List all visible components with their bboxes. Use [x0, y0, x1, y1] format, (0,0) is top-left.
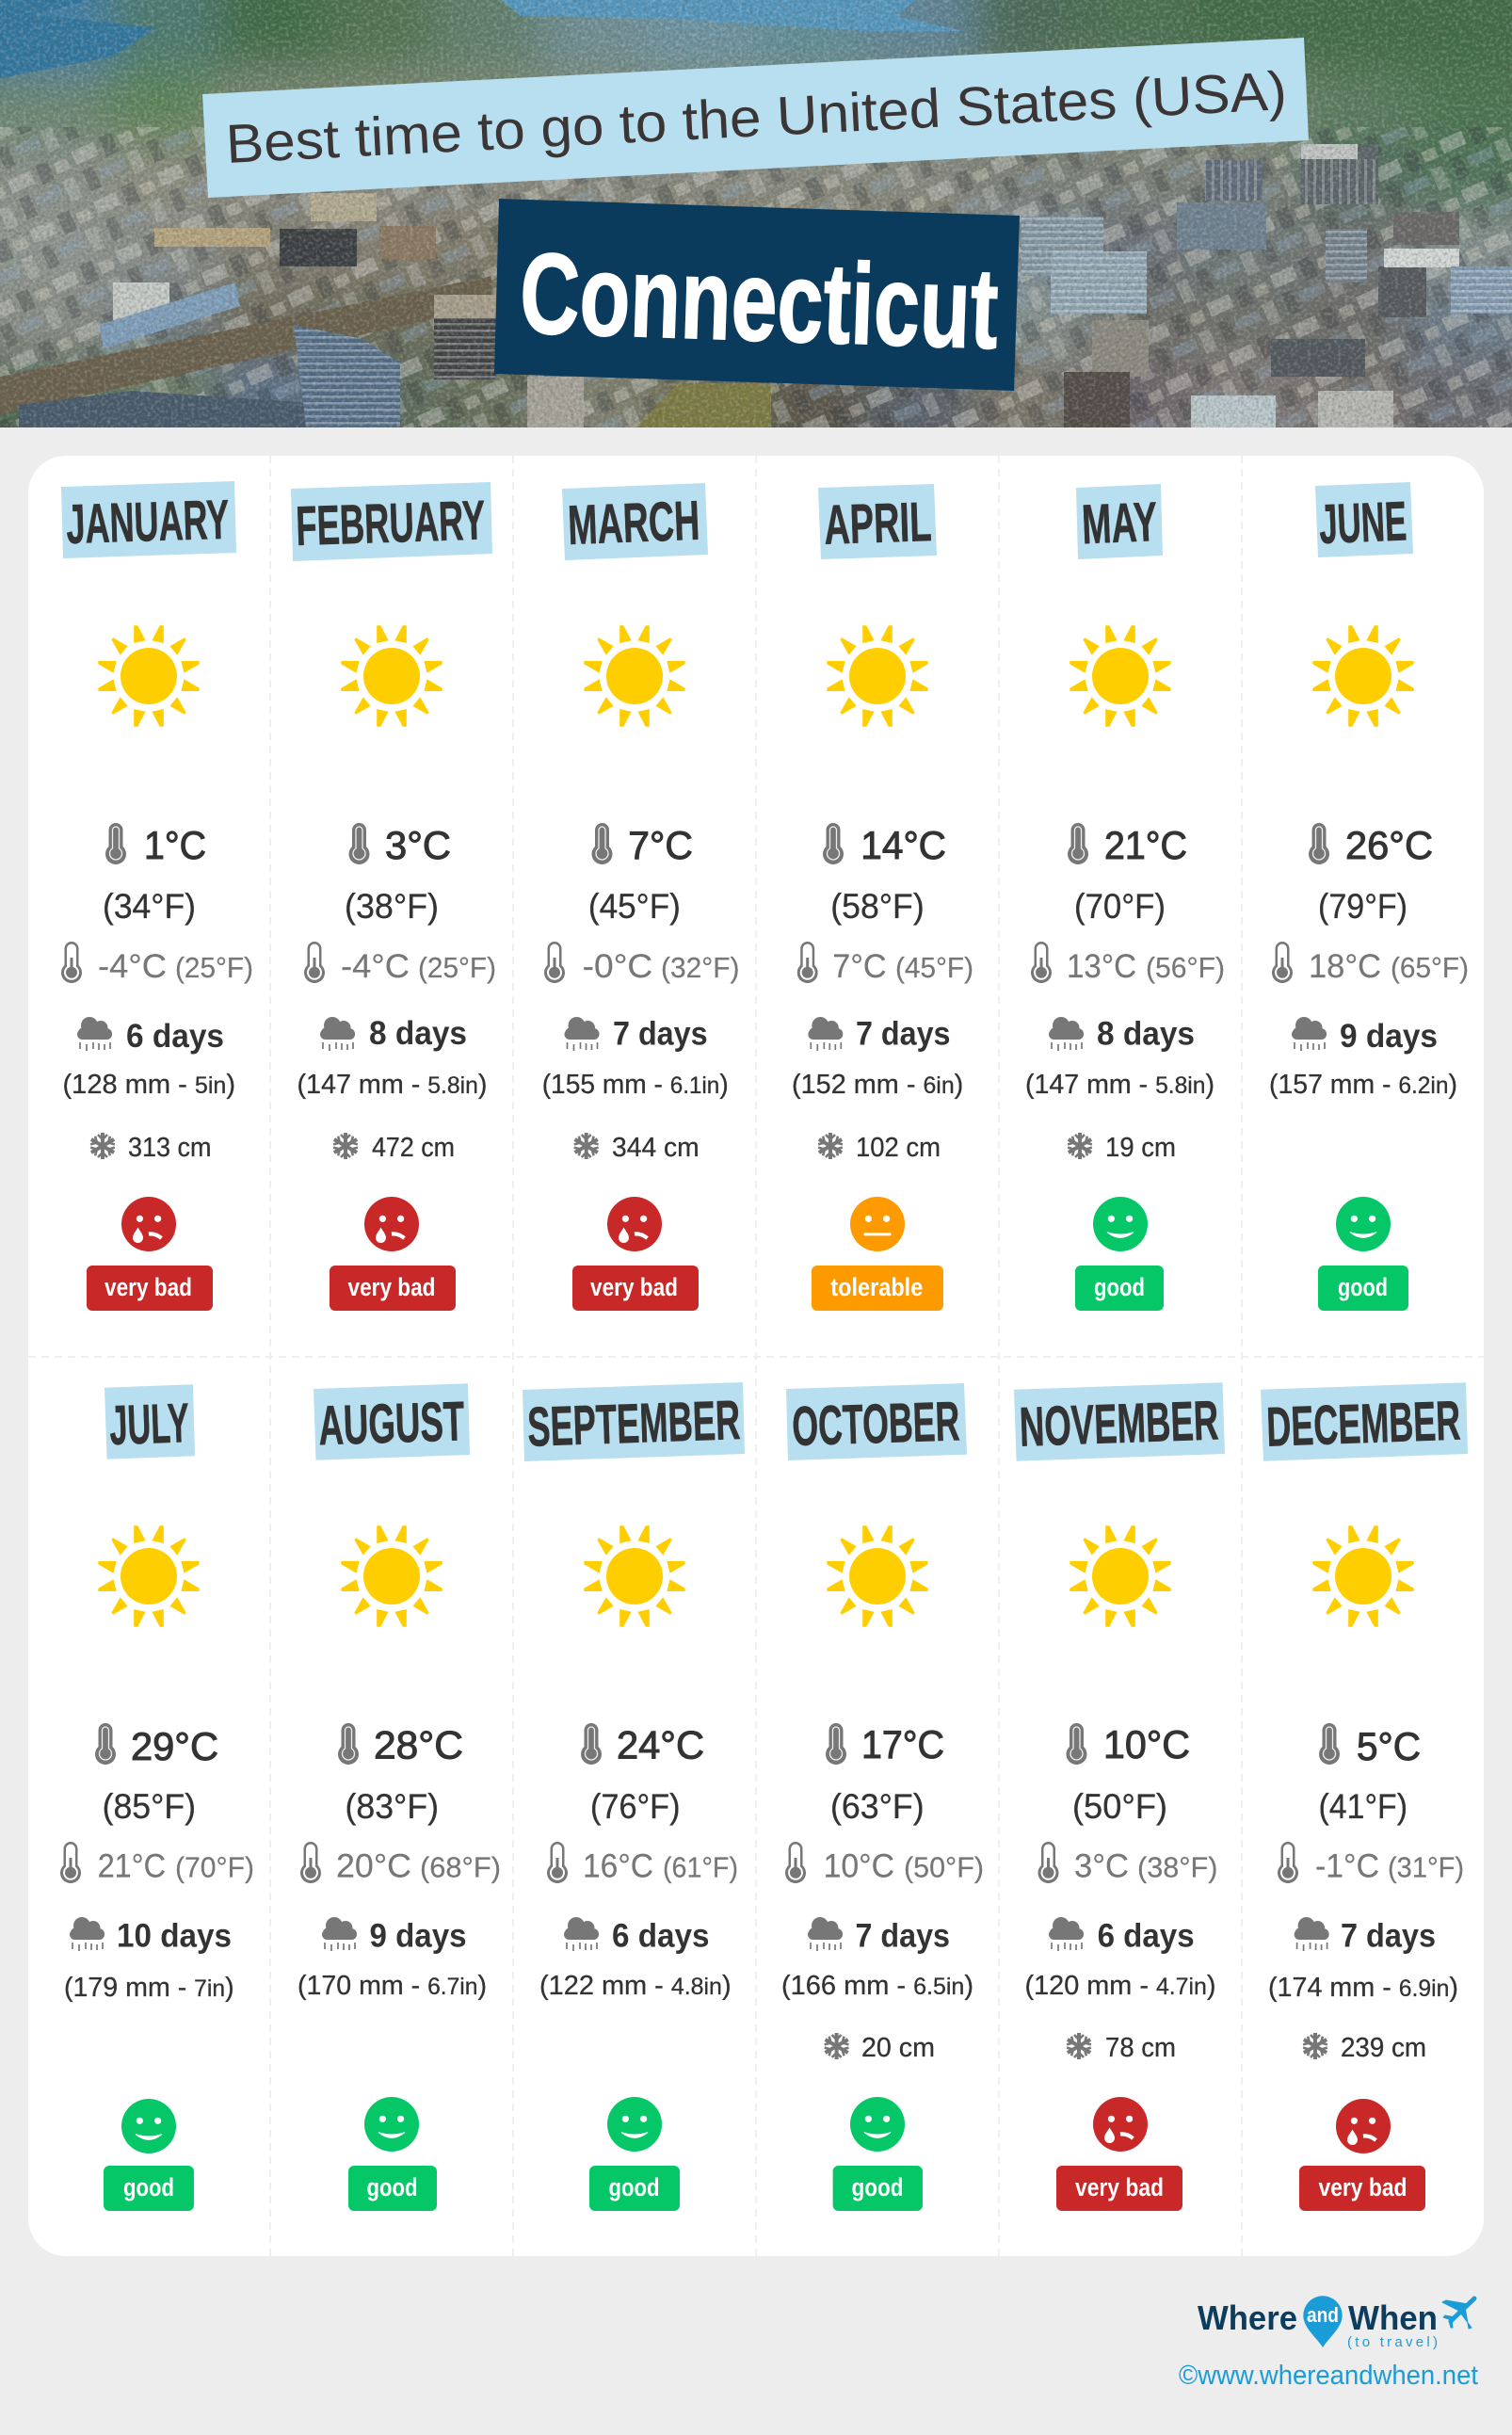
month: May: 19 cm — [1105, 1133, 1176, 1163]
month: June: 18°C — [1309, 948, 1381, 985]
month: December: 7 days — [1341, 1918, 1436, 1955]
month: September: (61°F) — [663, 1851, 738, 1883]
month: April: APRIL — [823, 491, 932, 556]
month: March: 7 days — [613, 1016, 708, 1053]
month: July — [60, 1384, 254, 2211]
month: December: 239 cm — [1341, 2033, 1426, 2063]
month: October — [781, 1383, 984, 2211]
month: June — [1269, 482, 1469, 1311]
month: April — [792, 484, 973, 1311]
month: March — [542, 483, 740, 1311]
month: March: MARCH — [567, 490, 700, 556]
month: June: good — [1338, 1273, 1388, 1301]
month: July: (85°F) — [103, 1787, 196, 1826]
logo: Where and When (to travel): When — [1348, 2298, 1438, 2337]
month: March: (155 mm - 6.1in) — [542, 1070, 729, 1100]
month: May — [1025, 484, 1225, 1311]
month: February: very bad — [348, 1273, 435, 1301]
month: April: (58°F) — [830, 887, 925, 926]
month: July: (179 mm - 7in) — [64, 1973, 234, 2003]
month: August: (83°F) — [345, 1787, 439, 1826]
month: October: 17°C — [861, 1722, 944, 1766]
month: September: 24°C — [617, 1723, 704, 1766]
month: November: (50°F) — [1072, 1787, 1167, 1826]
title banner: Connecticut: Connecticut — [518, 229, 1000, 373]
month: October: 10°C — [824, 1847, 894, 1885]
month: December: (174 mm - 6.9in) — [1268, 1973, 1458, 2003]
month: August — [298, 1383, 501, 2211]
month: June: 9 days — [1340, 1018, 1438, 1055]
month: November: NOVEMBER — [1019, 1389, 1219, 1459]
month: June: (157 mm - 6.2in) — [1269, 1070, 1457, 1100]
month: January — [61, 481, 253, 1311]
subtitle banner — [202, 38, 1309, 198]
month: October: (166 mm - 6.5in) — [781, 1971, 973, 2001]
month: May: (70°F) — [1074, 887, 1166, 926]
month: April: 7°C — [832, 948, 887, 985]
subtitle banner: Best time to go to the United States (USA) — [224, 60, 1288, 175]
month: January: (25°F) — [175, 951, 253, 984]
month: November: (120 mm - 4.7in) — [1024, 1971, 1216, 2001]
logo: Where and When (to travel): and — [1307, 2303, 1339, 2327]
month: June: 26°C — [1345, 823, 1433, 867]
month: November: 6 days — [1098, 1918, 1195, 1955]
month: October: (50°F) — [904, 1851, 984, 1883]
month: March: 7°C — [628, 823, 693, 867]
month: February: 472 cm — [372, 1133, 455, 1163]
month: August: 20°C — [336, 1847, 411, 1885]
month: October: good — [851, 2173, 904, 2201]
month: November: 10°C — [1103, 1722, 1190, 1766]
month: October: (63°F) — [830, 1787, 925, 1826]
month: January: very bad — [105, 1273, 192, 1301]
month: February: 8 days — [369, 1015, 467, 1052]
month: July: 21°C — [98, 1847, 166, 1885]
title banner: Connecticut — [494, 199, 1020, 391]
month: July: 10 days — [117, 1918, 232, 1955]
month: May: 13°C — [1067, 948, 1136, 985]
month: July: (70°F) — [175, 1851, 254, 1883]
month: August: (68°F) — [420, 1851, 501, 1883]
month: April: tolerable — [830, 1273, 923, 1301]
month: May: 8 days — [1097, 1016, 1195, 1053]
month: July: good — [123, 2173, 174, 2201]
month: September: (122 mm - 4.8in) — [539, 1971, 732, 2001]
month: May: MAY — [1081, 491, 1158, 556]
month: April: (45°F) — [895, 951, 973, 984]
month: May: good — [1094, 1273, 1145, 1301]
month: November — [1014, 1382, 1225, 2211]
month: June: (65°F) — [1391, 951, 1469, 984]
month: February: FEBRUARY — [295, 489, 486, 557]
month: April: 14°C — [861, 823, 946, 867]
month: May: 21°C — [1104, 823, 1187, 867]
month: December: (41°F) — [1318, 1787, 1407, 1826]
month: December: 5°C — [1357, 1724, 1421, 1768]
month: June: JUNE — [1318, 490, 1407, 556]
month: January: 6 days — [126, 1018, 224, 1055]
month: January: 313 cm — [128, 1133, 211, 1163]
month: April: 7 days — [856, 1016, 951, 1053]
month: December — [1261, 1382, 1468, 2211]
month: October: 7 days — [855, 1918, 950, 1955]
month: September: good — [608, 2173, 659, 2201]
month: July: 29°C — [131, 1724, 218, 1768]
month: February: 3°C — [385, 823, 451, 867]
month: November: very bad — [1075, 2173, 1164, 2201]
month: February: (38°F) — [345, 887, 439, 926]
month: August: AUGUST — [317, 1390, 465, 1457]
panel: monthly climate table — [28, 456, 1484, 2256]
month: June: (79°F) — [1318, 887, 1407, 926]
month: February: -4°C — [341, 948, 410, 985]
month: December: -1°C — [1315, 1847, 1379, 1885]
month: September: (76°F) — [590, 1787, 680, 1826]
hero aerial photo of Connecticut — [0, 0, 1512, 427]
month: January: (34°F) — [103, 887, 196, 926]
month: March: -0°C — [583, 948, 652, 985]
month: February: (147 mm - 5.8in) — [298, 1070, 488, 1100]
month: October: OCTOBER — [791, 1390, 960, 1458]
month: November: 3°C — [1074, 1847, 1129, 1885]
month: September: 16°C — [583, 1847, 653, 1885]
month: September: SEPTEMBER — [526, 1389, 741, 1459]
month: July: JULY — [108, 1392, 190, 1457]
logo: Where and When (to travel) — [1198, 2296, 1474, 2350]
month: March: (32°F) — [661, 951, 740, 984]
month: October: 20 cm — [861, 2033, 935, 2063]
month: November: 78 cm — [1105, 2033, 1176, 2063]
logo: Where and When (to travel): (to travel) — [1347, 2334, 1438, 2350]
month: May: (56°F) — [1146, 951, 1225, 984]
month: December: very bad — [1318, 2173, 1407, 2201]
month: March: very bad — [590, 1273, 678, 1301]
month: August: 28°C — [374, 1723, 463, 1766]
month: September: 6 days — [612, 1918, 710, 1955]
month: November: (38°F) — [1137, 1851, 1218, 1883]
month: January: (128 mm - 5in) — [62, 1070, 235, 1100]
month: March: 344 cm — [612, 1133, 700, 1163]
month: February: (25°F) — [418, 951, 496, 984]
month: August: (170 mm - 6.7in) — [298, 1971, 487, 2001]
month: August: 9 days — [369, 1918, 467, 1955]
month: March: (45°F) — [588, 887, 681, 926]
month: September — [523, 1382, 745, 2211]
month: May: (147 mm - 5.8in) — [1025, 1070, 1214, 1100]
month: August: good — [367, 2173, 418, 2201]
month: April: (152 mm - 6in) — [792, 1070, 963, 1100]
month: January: -4°C — [98, 948, 167, 985]
month: January: 1°C — [144, 823, 206, 867]
logo: Where and When (to travel): Where — [1198, 2298, 1297, 2337]
month: December: (31°F) — [1388, 1851, 1464, 1883]
copyright url: ©www.whereandwhen.net — [1179, 2361, 1478, 2391]
month: February — [291, 482, 496, 1311]
month: January: JANUARY — [65, 489, 230, 556]
month: April: 102 cm — [856, 1133, 941, 1163]
